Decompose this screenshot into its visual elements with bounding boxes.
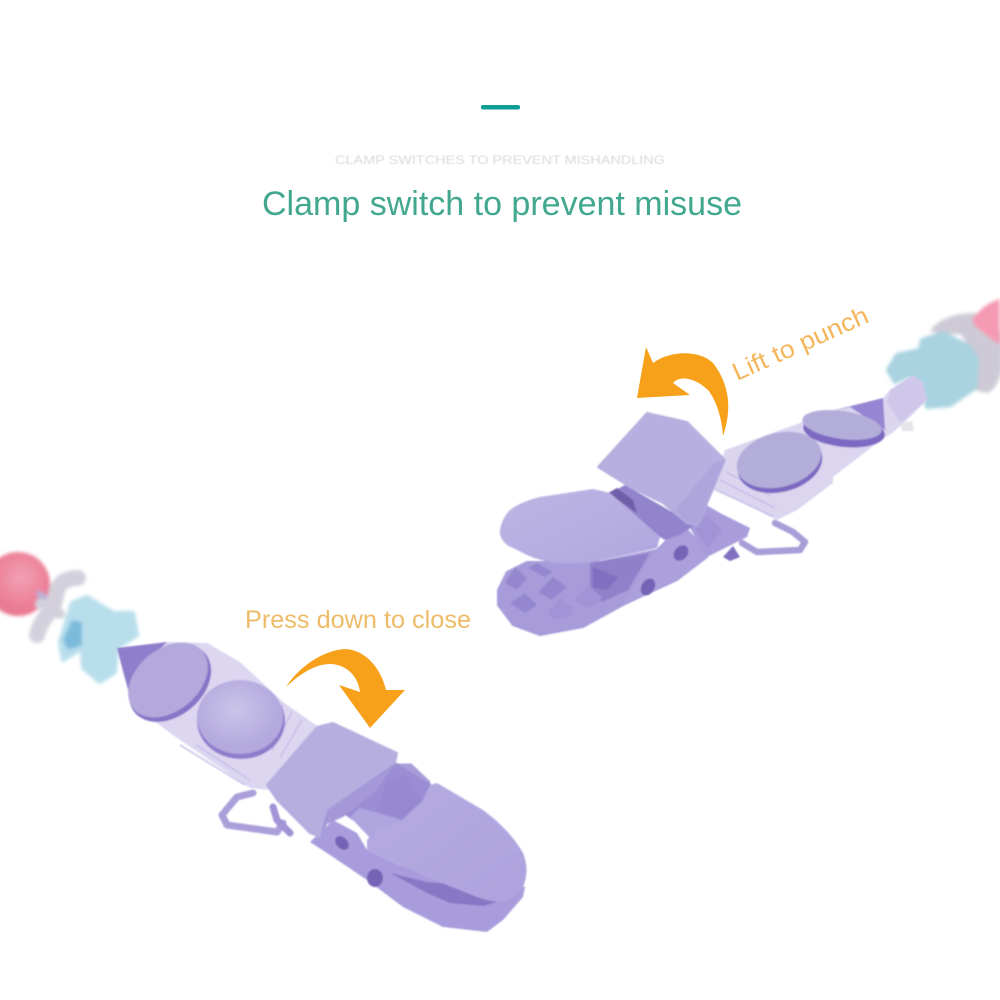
snap buttons: [114, 628, 226, 738]
holes: [671, 542, 691, 564]
arrow: lift: [637, 347, 728, 436]
heading: Clamp switch to prevent misuse: [262, 185, 742, 223]
lever: [267, 723, 397, 837]
hinge: [690, 503, 750, 557]
arrow: press: [286, 649, 405, 728]
lever: [598, 413, 725, 525]
body side and lower jaw: [310, 820, 525, 932]
ribbon: [117, 642, 320, 790]
jaw side: [623, 530, 707, 605]
lower jaw: [498, 530, 707, 635]
closed clip: press to close: [0, 552, 526, 932]
label: press down to close: Press down to close: [245, 606, 471, 634]
lever shadow and slot: [610, 485, 695, 540]
holes: [332, 833, 352, 853]
open clip: lift to open: [498, 299, 1000, 635]
teeth: [505, 563, 618, 620]
snap buttons: [732, 426, 828, 502]
clip head: [350, 775, 526, 902]
accent rule: [481, 105, 520, 110]
label: lift to punch: Lift to punch: [728, 302, 873, 386]
beads right: [888, 299, 1000, 407]
upper jaw: [500, 489, 660, 564]
beads left: [0, 552, 137, 682]
rear ring and hinge: [393, 767, 427, 783]
ring: [222, 793, 283, 832]
subheading: CLAMP SWITCHES TO PREVENT MISHANDLING: [335, 153, 665, 167]
ring: [742, 523, 805, 552]
ribbon: [712, 375, 927, 520]
